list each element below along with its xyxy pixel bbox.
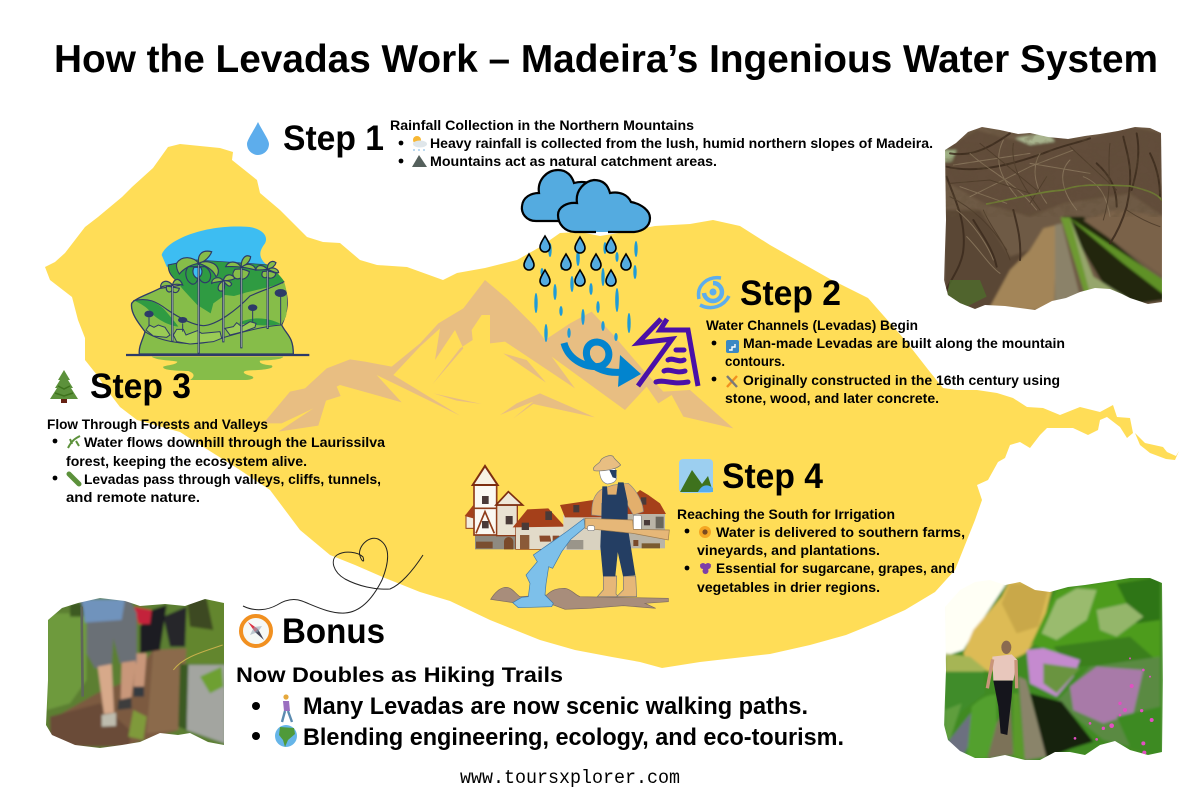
step 2 text block: Originally constructed in the 16th century using xyxy=(743,373,1060,388)
step 4 text block: vegetables in drier regions. xyxy=(697,580,880,595)
step 1 text block: Mountains act as natural catchment areas. xyxy=(430,154,717,169)
step 4 text block: Essential for sugarcane, grapes, and xyxy=(716,561,955,576)
heart doodle xyxy=(243,538,423,613)
hiker xyxy=(987,641,1017,735)
step 4 text block: vineyards, and plantations. xyxy=(697,543,880,558)
step 1 heading: Step 1 xyxy=(283,119,384,158)
map of Madeira xyxy=(45,144,1179,668)
photo: hiker on flower levada xyxy=(943,573,1163,763)
step 4 text block xyxy=(677,507,965,595)
step 3 text block: and remote nature. xyxy=(66,490,200,505)
step 1 text block: Rainfall Collection in the Northern Mountains xyxy=(390,118,694,133)
step 2 text block: stone, wood, and later concrete. xyxy=(725,391,939,406)
bonus text block xyxy=(236,664,844,751)
bonus heading: Bonus xyxy=(282,612,385,651)
farmer xyxy=(585,456,669,597)
step 2 text block: Water Channels (Levadas) Begin xyxy=(706,318,918,333)
illustration: laurissilva forest xyxy=(126,227,309,380)
icon: water drop xyxy=(247,122,269,155)
bonus text block: Blending engineering, ecology, and eco-tourism. xyxy=(303,724,844,751)
step 1 text block: Heavy rainfall is collected from the lush, humid northern slopes of Madeira. xyxy=(430,136,933,151)
step 4 text block: Reaching the South for Irrigation xyxy=(677,507,895,522)
mud ground xyxy=(491,587,668,609)
mountains illustration xyxy=(263,280,733,432)
step 4 heading: Step 4 xyxy=(722,457,824,496)
village buildings xyxy=(465,466,666,550)
step 3 text block xyxy=(47,417,386,505)
icon: rain clouds xyxy=(522,170,650,232)
step 2 heading: Step 2 xyxy=(740,274,841,313)
icon: compass xyxy=(241,616,271,646)
photo: hikers on path xyxy=(43,597,227,750)
step 4 text block: Water is delivered to southern farms, xyxy=(716,525,965,540)
step 3 heading: Step 3 xyxy=(90,367,191,406)
step 3 text block: Water flows downhill through the Laurissilva xyxy=(84,435,386,450)
step 2 text block: Man-made Levadas are built along the mountain xyxy=(743,336,1065,351)
rain drops xyxy=(534,241,638,342)
website footer: www.toursxplorer.com xyxy=(460,767,680,789)
step 1 text block xyxy=(390,118,933,169)
icon: evergreen tree xyxy=(50,370,78,403)
step 2 text block: contours. xyxy=(725,354,785,369)
arrow: water flow xyxy=(564,342,641,387)
step 3 text block: Levadas pass through valleys, cliffs, tunnels, xyxy=(84,472,381,487)
illustration: village and farmer xyxy=(465,456,669,609)
step 2 text block xyxy=(706,318,1065,406)
step 3 text block: forest, keeping the ecosystem alive. xyxy=(66,454,307,469)
bonus text block: Many Levadas are now scenic walking paths. xyxy=(303,693,808,720)
water stream xyxy=(513,519,585,608)
photo: tree tunnel levada xyxy=(943,123,1163,313)
icon: levada dam xyxy=(638,319,698,386)
flowers xyxy=(1074,657,1154,755)
outlined rain drops xyxy=(524,236,631,286)
title: How the Levadas Work – Madeira’s Ingenious Water System xyxy=(54,38,1158,81)
step 3 text block: Flow Through Forests and Valleys xyxy=(47,417,268,432)
bonus text block: Now Doubles as Hiking Trails xyxy=(236,664,563,687)
icon: national park xyxy=(679,459,713,493)
icon: swirl xyxy=(699,278,729,308)
